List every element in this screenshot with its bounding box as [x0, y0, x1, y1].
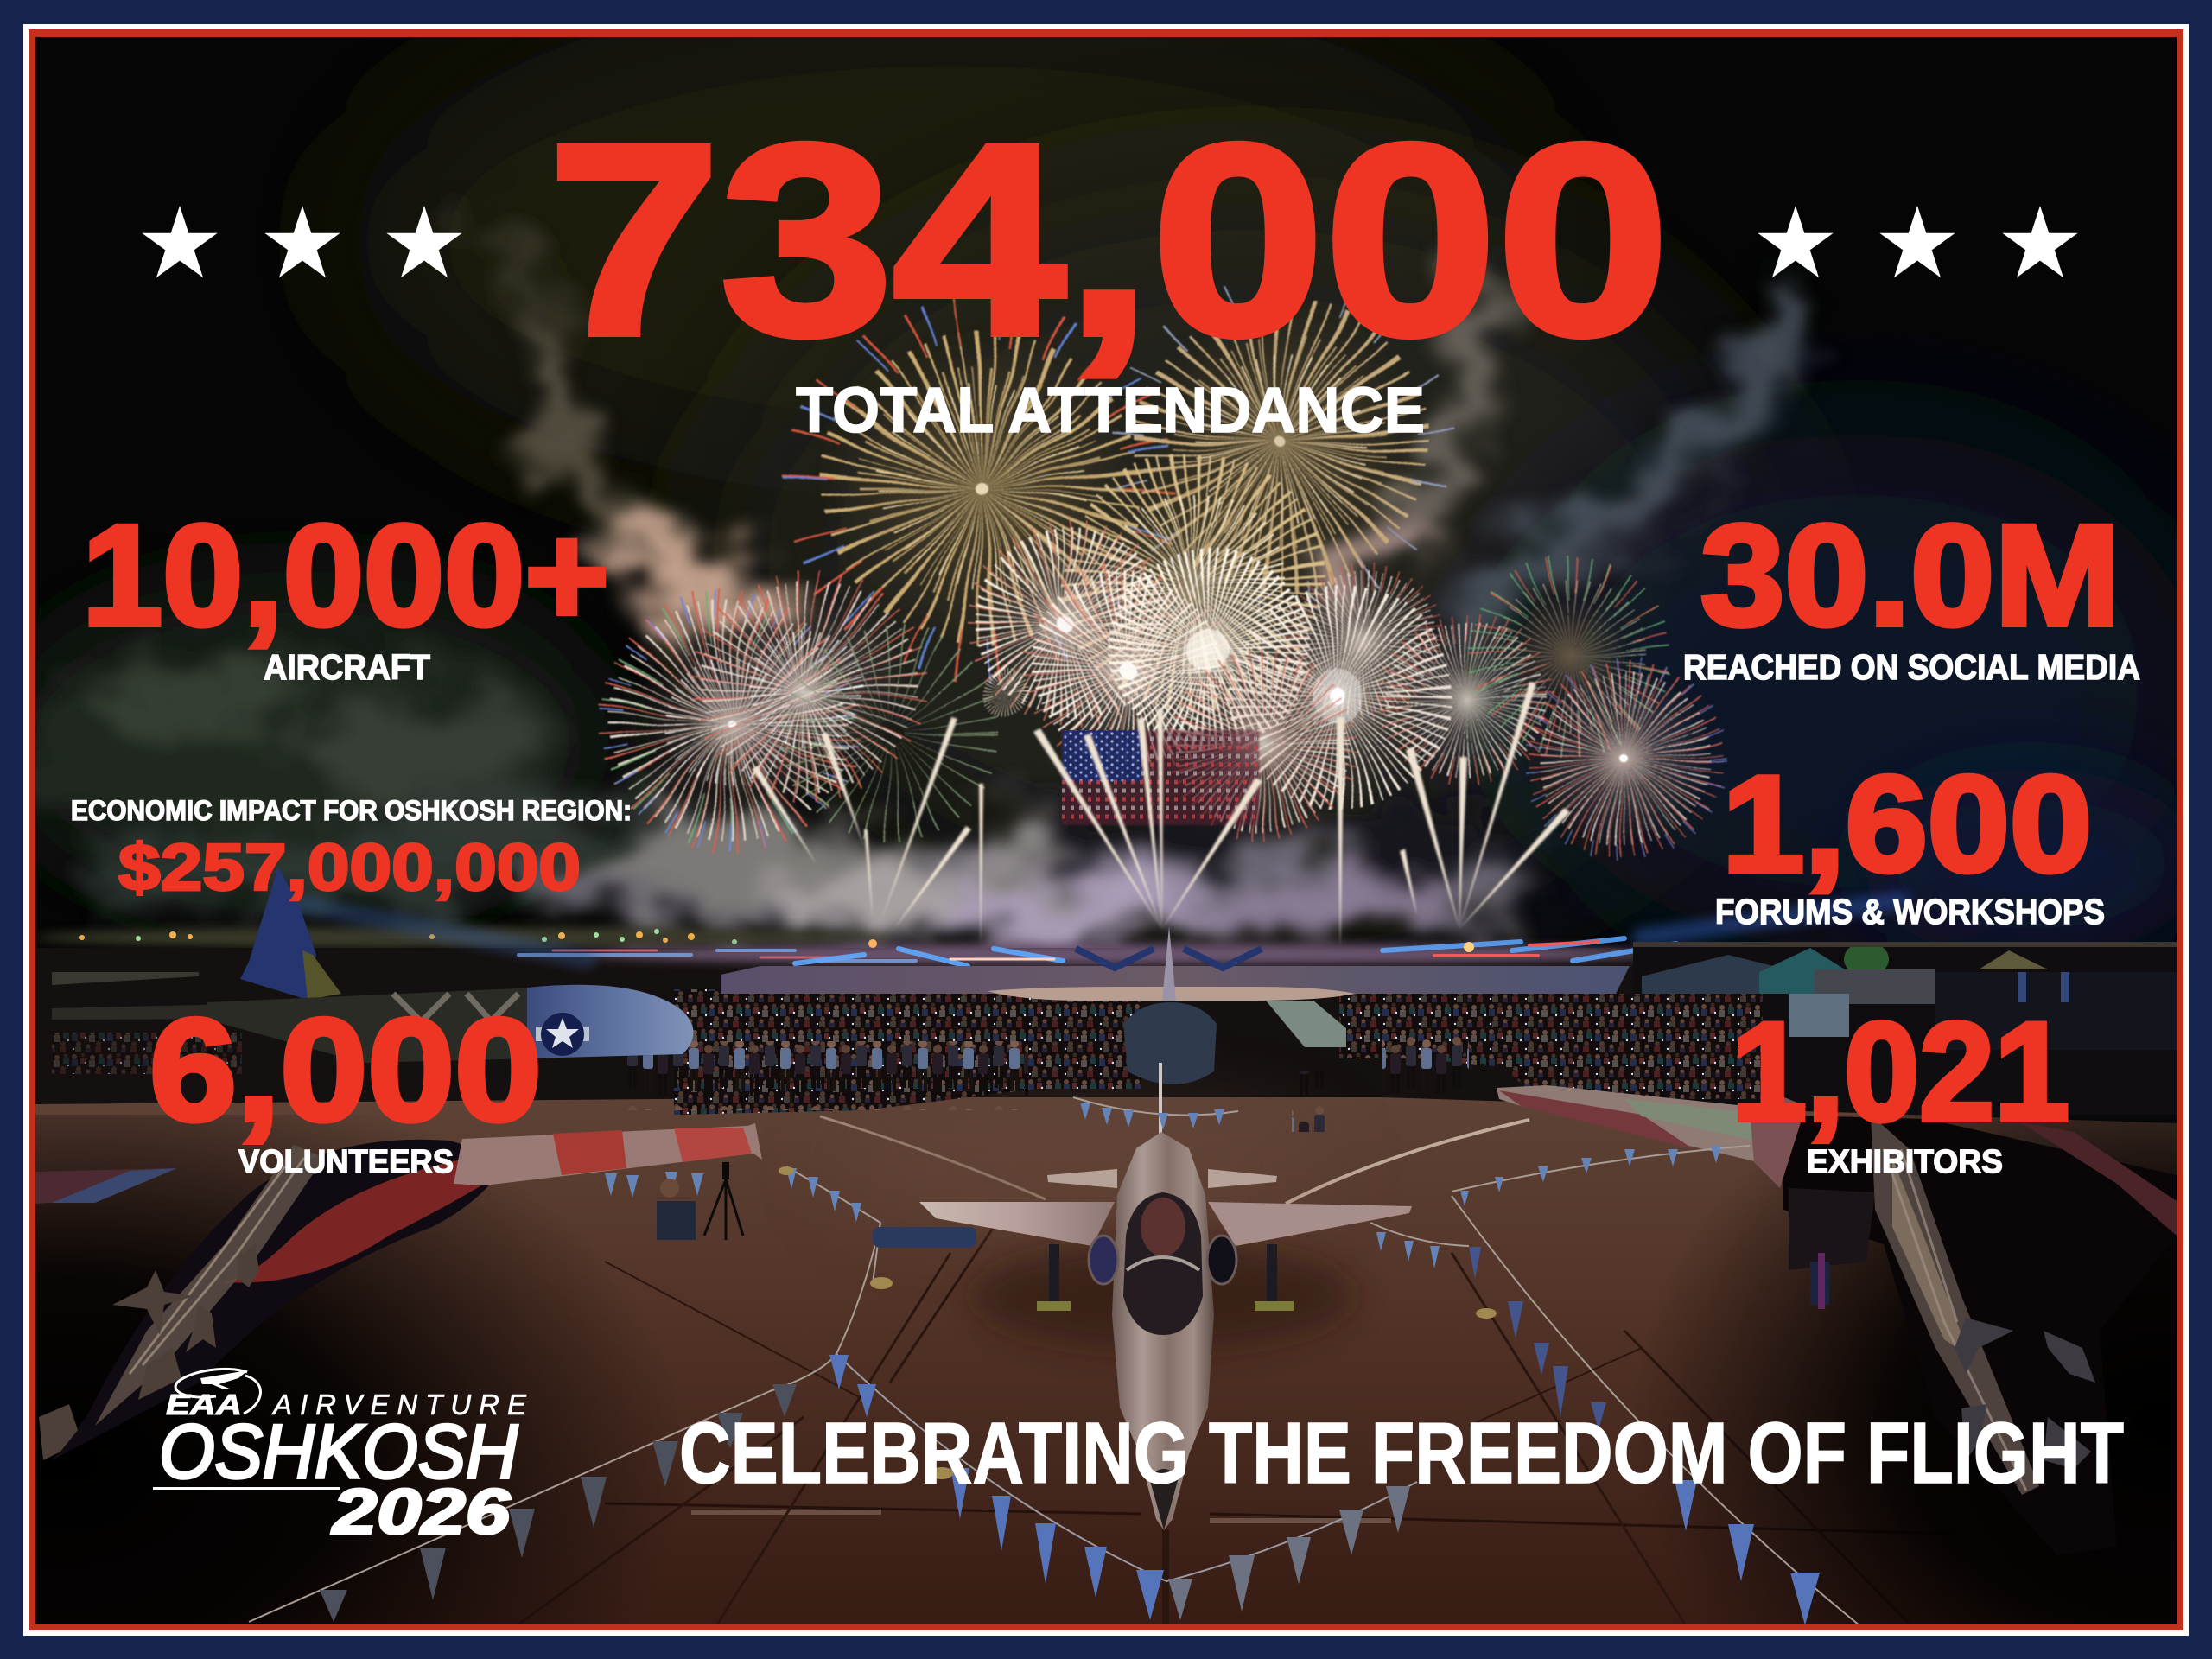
stat: forums and workshops: FORUMS & WORKSHOPS: [1715, 892, 2105, 931]
tail fin: [240, 867, 316, 1000]
headline label: TOTAL ATTENDANCE: [796, 374, 1425, 446]
fireworks bursts: [613, 290, 1719, 853]
stars left: [142, 206, 462, 277]
white bursts centre cluster: [975, 530, 1304, 764]
stat: social media reach: REACHED ON SOCIAL MEDIA: [1683, 647, 2140, 687]
stars: [39, 1244, 259, 1460]
logo AIRVENTURE: AIRVENTURE: [271, 1389, 527, 1421]
underside panel: [1789, 1188, 1875, 1270]
burst L: [1489, 573, 1655, 739]
dark field behind apron: [35, 948, 2177, 1138]
shadow: [973, 1244, 1353, 1348]
roundel: [536, 1013, 589, 1056]
wing: [52, 1002, 553, 1020]
white burst left centre: [713, 591, 903, 781]
fuselage: [207, 985, 693, 1063]
tailplanes: [1047, 1169, 1117, 1188]
upper wing: [988, 987, 1355, 1001]
silver spine: [1871, 1115, 2039, 1495]
burst F: [1033, 574, 1223, 764]
dim pennants in shadow: [320, 1384, 797, 1622]
near wing: [1497, 1085, 1763, 1162]
flag-painted jet right foreground: [1497, 1085, 2177, 1555]
apron ground: [35, 1097, 2177, 1624]
T-38 jet centre foreground: [919, 1132, 1412, 1530]
night sky: [35, 37, 2177, 948]
logo OSHKOSH: OSHKOSH: [159, 1408, 518, 1494]
coloured light streaks on runway: [294, 900, 1901, 968]
stat: forums and workshops: 1,600: [1722, 748, 2092, 900]
dark body: [52, 1140, 510, 1460]
parked warbird far centre: [721, 926, 1630, 1141]
propellers: [393, 994, 518, 1033]
burst N: [1294, 573, 1432, 711]
burst M: [1532, 666, 1719, 853]
stat: volunteers: 6,000: [149, 988, 542, 1151]
gold burst left: [809, 315, 1154, 661]
white burst far left: [613, 604, 848, 839]
stat: exhibitors: EXHIBITORS: [1807, 1144, 2003, 1180]
bright blue pennants: [830, 1355, 1820, 1625]
rising comet fountains: [752, 682, 1570, 950]
stanchions: [779, 1166, 1497, 1479]
wing root: [1750, 1097, 1806, 1188]
canopy: [1123, 1192, 1203, 1335]
concrete cracks and taxi lines: [518, 1116, 1953, 1624]
silver spine: [95, 1145, 324, 1426]
gold burst centre: [1064, 451, 1323, 710]
burst J: [1180, 662, 1344, 826]
intakes: [1089, 1236, 1118, 1284]
fuselage: [1112, 1132, 1214, 1530]
boarding steps: [1266, 1001, 1346, 1047]
stat: economic impact: $257,000,000: [118, 831, 581, 905]
props: [1076, 949, 1262, 968]
main wings: [919, 1202, 1115, 1246]
camera tripod and seated visitors: [657, 1162, 976, 1248]
far wing: [2020, 1122, 2177, 1236]
stat: volunteers: VOLUNTEERS: [238, 1144, 454, 1180]
flag-painted jet left foreground: [35, 1123, 762, 1460]
large wing: [721, 966, 1630, 994]
stat: aircraft: AIRCRAFT: [264, 647, 430, 687]
red nose sweep: [223, 1154, 510, 1283]
drone american flag: [1062, 730, 1259, 825]
fuselage: [1123, 1002, 1217, 1084]
stars right: [1758, 206, 2078, 277]
small distant pennants: [605, 1103, 1721, 1268]
ropes: [249, 1097, 1859, 1625]
green burst fringe: [830, 674, 950, 795]
logo emblem: [175, 1369, 260, 1414]
EAA AirVenture Oshkosh 2026 logo: [153, 1369, 527, 1548]
low smoke over airfield: [518, 790, 1555, 942]
nose tip: [1149, 1469, 1179, 1530]
antenna: [1159, 1063, 1162, 1141]
pale grey pennants: [1168, 1486, 1410, 1620]
burst K: [1394, 626, 1541, 773]
wing: [454, 1123, 762, 1185]
burst I: [1232, 588, 1448, 804]
small burst: [992, 681, 1016, 705]
dim blue pennants on right rope: [1469, 1247, 1606, 1430]
gold burst right: [1128, 290, 1436, 598]
tail: [1162, 926, 1176, 1001]
logo rule: [153, 1487, 340, 1490]
burst E: [1114, 552, 1304, 742]
right side buildings and trucks: [1633, 942, 2177, 1128]
stat: exhibitors: 1,021: [1732, 994, 2069, 1150]
stat: aircraft: 10,000+: [82, 496, 609, 656]
dark body: [1763, 1115, 2177, 1555]
stat: economic impact: ECONOMIC IMPACT FOR OSHKOSH REGION:: [71, 795, 632, 826]
rope barriers with pennants: [249, 1097, 1859, 1625]
far stripes wing: [35, 1168, 173, 1204]
burst D: [975, 530, 1165, 720]
stat: social media reach: 30.0M: [1700, 496, 2120, 656]
distant city lights: [35, 927, 899, 948]
smoke trails: [493, 242, 1780, 605]
logo year: 2026: [331, 1476, 511, 1548]
bomber aircraft at left: [52, 867, 693, 1063]
headline number: 734,000: [548, 88, 1669, 391]
drifting clouds left: [9, 648, 674, 907]
landing gear: [1037, 1244, 1294, 1311]
stars: [1955, 1318, 2095, 1469]
stat: economic impact: [71, 795, 632, 905]
logo EAA: EAA: [166, 1389, 242, 1421]
edge vignette on apron: [35, 1115, 2177, 1624]
white bursts right cluster: [1180, 573, 1719, 853]
crowd of spectators: [52, 989, 1763, 1132]
